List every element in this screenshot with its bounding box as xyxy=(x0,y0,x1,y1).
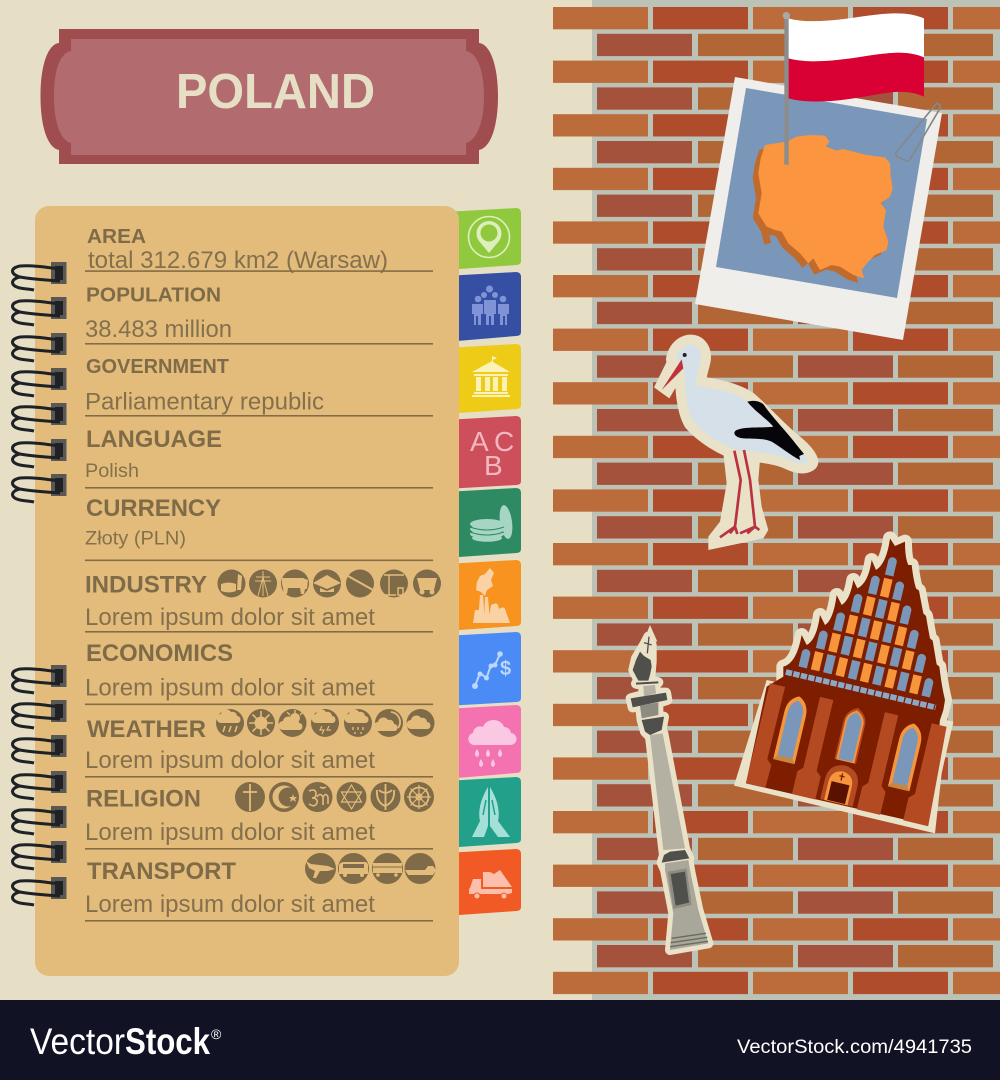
row: language: LANGUAGE xyxy=(86,426,222,453)
row: area: AREA xyxy=(87,225,146,248)
row: weather xyxy=(85,709,434,778)
row: currency: CURRENCY xyxy=(86,495,221,522)
weather icons xyxy=(216,709,434,737)
Sigismund column sticker xyxy=(631,625,708,950)
tab: religion xyxy=(445,777,521,848)
row: population xyxy=(85,284,433,345)
row: economics: ECONOMICS xyxy=(86,640,233,667)
buttresses xyxy=(746,683,790,788)
gable windows xyxy=(798,542,959,697)
church sticker xyxy=(734,536,987,833)
row: currency: Złoty (PLN) xyxy=(85,528,186,550)
row: industry: Lorem ipsum dolor sit amet xyxy=(85,604,375,631)
row: area xyxy=(85,225,433,274)
tab: currency xyxy=(445,488,521,558)
row: weather: Lorem ipsum dolor sit amet xyxy=(85,747,375,774)
spiral binding lower xyxy=(12,665,66,905)
title plaque xyxy=(40,29,498,164)
industry icons xyxy=(218,570,441,598)
spiral binding upper xyxy=(12,262,66,502)
row: currency xyxy=(85,495,433,561)
stork sticker xyxy=(654,345,808,550)
image id: VectorStock.com/4941735 xyxy=(737,1037,972,1058)
row: industry: INDUSTRY xyxy=(85,572,207,598)
map of Poland xyxy=(753,135,893,283)
row: population: 38.483 million xyxy=(85,316,232,343)
row: language: Polish xyxy=(85,461,139,482)
religion icons xyxy=(235,782,434,812)
row: economics xyxy=(85,640,433,705)
title: POLAND xyxy=(176,65,375,119)
VectorStock logo: Vector xyxy=(30,1021,125,1062)
colored side tabs xyxy=(445,208,521,916)
row: religion: RELIGION xyxy=(86,786,201,812)
tab: population xyxy=(445,272,521,342)
footer bar xyxy=(0,1000,1000,1080)
tab: industry xyxy=(445,560,521,631)
transport icons xyxy=(305,853,436,884)
tab: language: B xyxy=(484,450,503,481)
row: economics: Lorem ipsum dolor sit amet xyxy=(85,674,375,702)
paperclip xyxy=(896,103,940,161)
polaroid photo with map xyxy=(695,77,942,340)
flag of Poland xyxy=(783,12,924,165)
row: government xyxy=(85,355,433,417)
footer bar: Stock xyxy=(125,1021,210,1062)
tab: language: C xyxy=(494,426,514,457)
notebook panel xyxy=(12,206,459,976)
brick wall xyxy=(553,0,1000,1000)
row: government: Parliamentary republic xyxy=(85,388,324,416)
row: transport xyxy=(85,853,436,922)
row: religion xyxy=(85,782,434,850)
tab: weather xyxy=(445,705,521,779)
row: weather: WEATHER xyxy=(87,716,206,743)
row: government: GOVERNMENT xyxy=(86,355,229,378)
door xyxy=(820,762,861,807)
row: area: total 312.679 km2 (Warsaw) xyxy=(88,247,388,274)
footer bar: ® xyxy=(211,1026,222,1042)
tab: economics: $ xyxy=(500,658,511,680)
tab: transport xyxy=(445,849,521,916)
tab: economics xyxy=(445,632,521,706)
large windows xyxy=(773,694,810,764)
row: industry xyxy=(85,570,441,633)
tab: language: A xyxy=(470,426,489,457)
row: language xyxy=(85,426,433,489)
tab: area xyxy=(445,208,521,270)
row: transport: Lorem ipsum dolor sit amet xyxy=(85,891,375,918)
row: religion: Lorem ipsum dolor sit amet xyxy=(85,819,375,846)
row: population: POPULATION xyxy=(86,284,221,306)
tab: government xyxy=(445,344,521,414)
tab: language xyxy=(445,416,521,489)
row: transport: TRANSPORT xyxy=(87,858,236,885)
